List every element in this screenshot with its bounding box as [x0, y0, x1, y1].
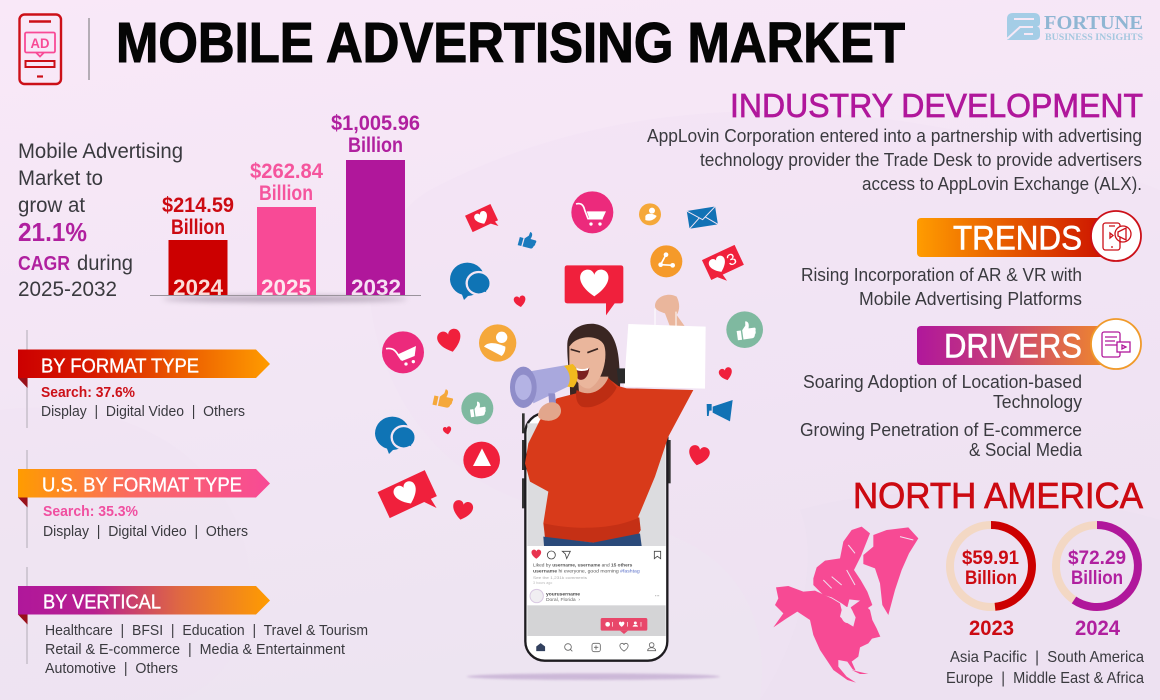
- icon: phone with content: [1091, 319, 1141, 369]
- post caption: 3 hours ago: [533, 581, 553, 585]
- center illustration: phone, woman and social icons: [375, 191, 763, 680]
- bar: 2025: [250, 160, 323, 300]
- bar: 2025: $262.84: [250, 160, 323, 183]
- donut: 2024: 2024: [1075, 617, 1120, 640]
- other regions: Europe | Middle East & Africa: [946, 670, 1144, 687]
- bar: 2025: Billion: [259, 182, 313, 205]
- panel: by vertical: Automotive | Others: [45, 660, 178, 677]
- drivers text: Soaring Adoption of Location-based: [803, 372, 1082, 392]
- icon: green thumb circle small: [461, 392, 493, 424]
- panel: U.S. by format type: Display | Digital Video | Others: [43, 523, 248, 540]
- panel: by vertical: [18, 567, 368, 677]
- growth text block: Mobile Advertising: [18, 140, 183, 163]
- icon: blue thumb: [518, 230, 538, 250]
- hair: [567, 324, 620, 402]
- donut: 2024: $72.29: [1068, 547, 1126, 569]
- icon: cart circle: [571, 191, 613, 233]
- icon: large tilted heart bubble: [378, 470, 441, 528]
- donut: 2024: Billion: [1071, 567, 1123, 589]
- megaphone: [528, 365, 577, 403]
- icon: phone with megaphone: [1091, 211, 1141, 261]
- panel: trends: [801, 211, 1141, 309]
- icon: chat bubbles top: [450, 263, 491, 300]
- bar: 2032: Billion: [348, 134, 403, 157]
- other regions: [946, 649, 1144, 687]
- body text: AppLovin Corporation entered into a partnership with advertising: [647, 126, 1142, 146]
- body text: [647, 126, 1142, 194]
- growth text block: 2025-2032: [18, 278, 117, 301]
- panel: by format type: Search: 37.6%: [41, 385, 135, 401]
- panel: U.S. by format type: U.S. BY FORMAT TYPE: [42, 474, 242, 496]
- bar: 2032: [331, 112, 420, 300]
- trends text: Mobile Advertising Platforms: [859, 289, 1082, 309]
- growth text block: Market to: [18, 167, 103, 190]
- growth text block: during: [77, 252, 133, 275]
- panel: by vertical: BY VERTICAL: [43, 592, 161, 614]
- industry development block: [647, 88, 1143, 194]
- icon: heart right lower: [687, 444, 711, 467]
- panel: by vertical: Healthcare | BFSI | Education | Travel & Tourism: [45, 622, 368, 639]
- icon: mobile ad: AD: [30, 36, 50, 51]
- post caption: Liked by username, username and 15 others: [533, 563, 633, 568]
- bar: 2025: 2025: [261, 275, 311, 300]
- icon: small heart right: [718, 367, 734, 382]
- header: [20, 11, 905, 84]
- post caption: username hi everyone, good morning #fashtag: [533, 569, 640, 574]
- drivers text: [800, 372, 1083, 460]
- body text: technology provider the Trade Desk to provide advertisers: [700, 150, 1142, 170]
- donut: 2023: 2023: [969, 617, 1014, 640]
- trends text: Rising Incorporation of AR & VR with: [801, 265, 1082, 285]
- icon: heart bubble with count: [702, 245, 747, 287]
- post account row: [530, 589, 660, 603]
- notification pill: [601, 618, 647, 634]
- logo: Fortune Business Insights: BUSINESS INSIGHTS: [1045, 33, 1143, 43]
- bar: 2024: [162, 194, 234, 300]
- phone navigation bar: [537, 643, 656, 652]
- heading: INDUSTRY DEVELOPMENT: [730, 88, 1143, 125]
- icon: heart bubble: [465, 204, 500, 237]
- panel: drivers: [800, 319, 1141, 460]
- post caption: See the 1,231k comments: [533, 576, 587, 580]
- shopping bag: [624, 324, 706, 389]
- logo: Fortune Business Insights: FORTUNE: [1044, 12, 1143, 34]
- face: [569, 337, 605, 388]
- post account row: ···: [655, 594, 660, 599]
- icon: mail: [687, 207, 718, 229]
- icon: tiny heart: [443, 426, 452, 435]
- growth text block: [18, 140, 183, 301]
- panel: drivers: DRIVERS: [944, 328, 1082, 366]
- body text: access to AppLovin Exchange (ALX).: [862, 174, 1142, 194]
- bar chart: market size: [150, 112, 421, 302]
- icon: chat bubbles left: [375, 417, 416, 454]
- growth text block: CAGR: [18, 252, 70, 275]
- icon: large heart bubble: [565, 265, 623, 315]
- bar: 2024: $214.59: [162, 194, 234, 217]
- panel: U.S. by format type: Search: 35.3%: [43, 504, 138, 520]
- map: North America: [773, 527, 918, 683]
- bar: 2032: $1,005.96: [331, 112, 420, 135]
- other regions: Asia Pacific | South America: [950, 649, 1144, 666]
- panel: by format type: Display | Digital Video | Others: [41, 403, 245, 420]
- growth text block: 21.1%: [18, 217, 87, 247]
- hand on megaphone: [538, 402, 561, 421]
- woman with megaphone and shopping bag: [510, 295, 706, 546]
- drivers text: & Social Media: [969, 440, 1083, 460]
- icon: user circle small: [639, 203, 661, 225]
- drivers text: Growing Penetration of E-commerce: [800, 420, 1082, 440]
- post actions: [532, 550, 661, 559]
- raised hand and arm: [655, 295, 685, 327]
- panel: by vertical: Retail & E-commerce | Media & Entertainment: [45, 641, 346, 658]
- panel: by format type: BY FORMAT TYPE: [41, 356, 199, 378]
- logo: Fortune Business Insights: [1007, 12, 1143, 43]
- neck: [578, 377, 608, 407]
- panel: north america: [773, 475, 1144, 687]
- donut: 2023: Billion: [965, 567, 1017, 589]
- icon: heart lower: [451, 499, 474, 522]
- icon: cart circle left: [382, 331, 424, 373]
- icon: small heart: [513, 295, 527, 308]
- phone: [522, 413, 671, 661]
- icon: mobile ad: [20, 14, 61, 84]
- drivers text: Technology: [993, 392, 1082, 412]
- icon: heart bubble with count: 3: [724, 251, 740, 270]
- panel: trends: TRENDS: [953, 220, 1082, 258]
- growth text block: grow at: [18, 194, 85, 217]
- icon: heart left: [436, 327, 464, 355]
- heading: NORTH AMERICA: [853, 475, 1144, 516]
- donut: 2023: [950, 525, 1032, 640]
- donut: 2024: [1056, 525, 1138, 640]
- icon: user circle: [479, 324, 516, 362]
- icon: green thumb circle: [726, 311, 763, 348]
- panel: by format type: [18, 330, 270, 428]
- donut: 2023: $59.91: [962, 547, 1019, 569]
- post caption: [533, 563, 640, 585]
- bar: 2024: Billion: [171, 216, 225, 239]
- post account row: yourusername: [546, 591, 581, 596]
- bar: 2032: 2032: [351, 275, 401, 300]
- icon: blue megaphone: [707, 400, 733, 421]
- icon: share circle: [650, 245, 682, 277]
- panel: U.S. by format type: [18, 450, 270, 548]
- trends text: [801, 265, 1082, 309]
- sweater: [525, 378, 693, 543]
- title: MOBILE ADVERTISING MARKET: [116, 11, 905, 75]
- bar: 2024: 2024: [173, 275, 224, 300]
- icon: orange thumb: [432, 387, 455, 409]
- icon: triangle circle: [463, 442, 500, 478]
- post account row: Doral, Florida ›: [546, 597, 581, 602]
